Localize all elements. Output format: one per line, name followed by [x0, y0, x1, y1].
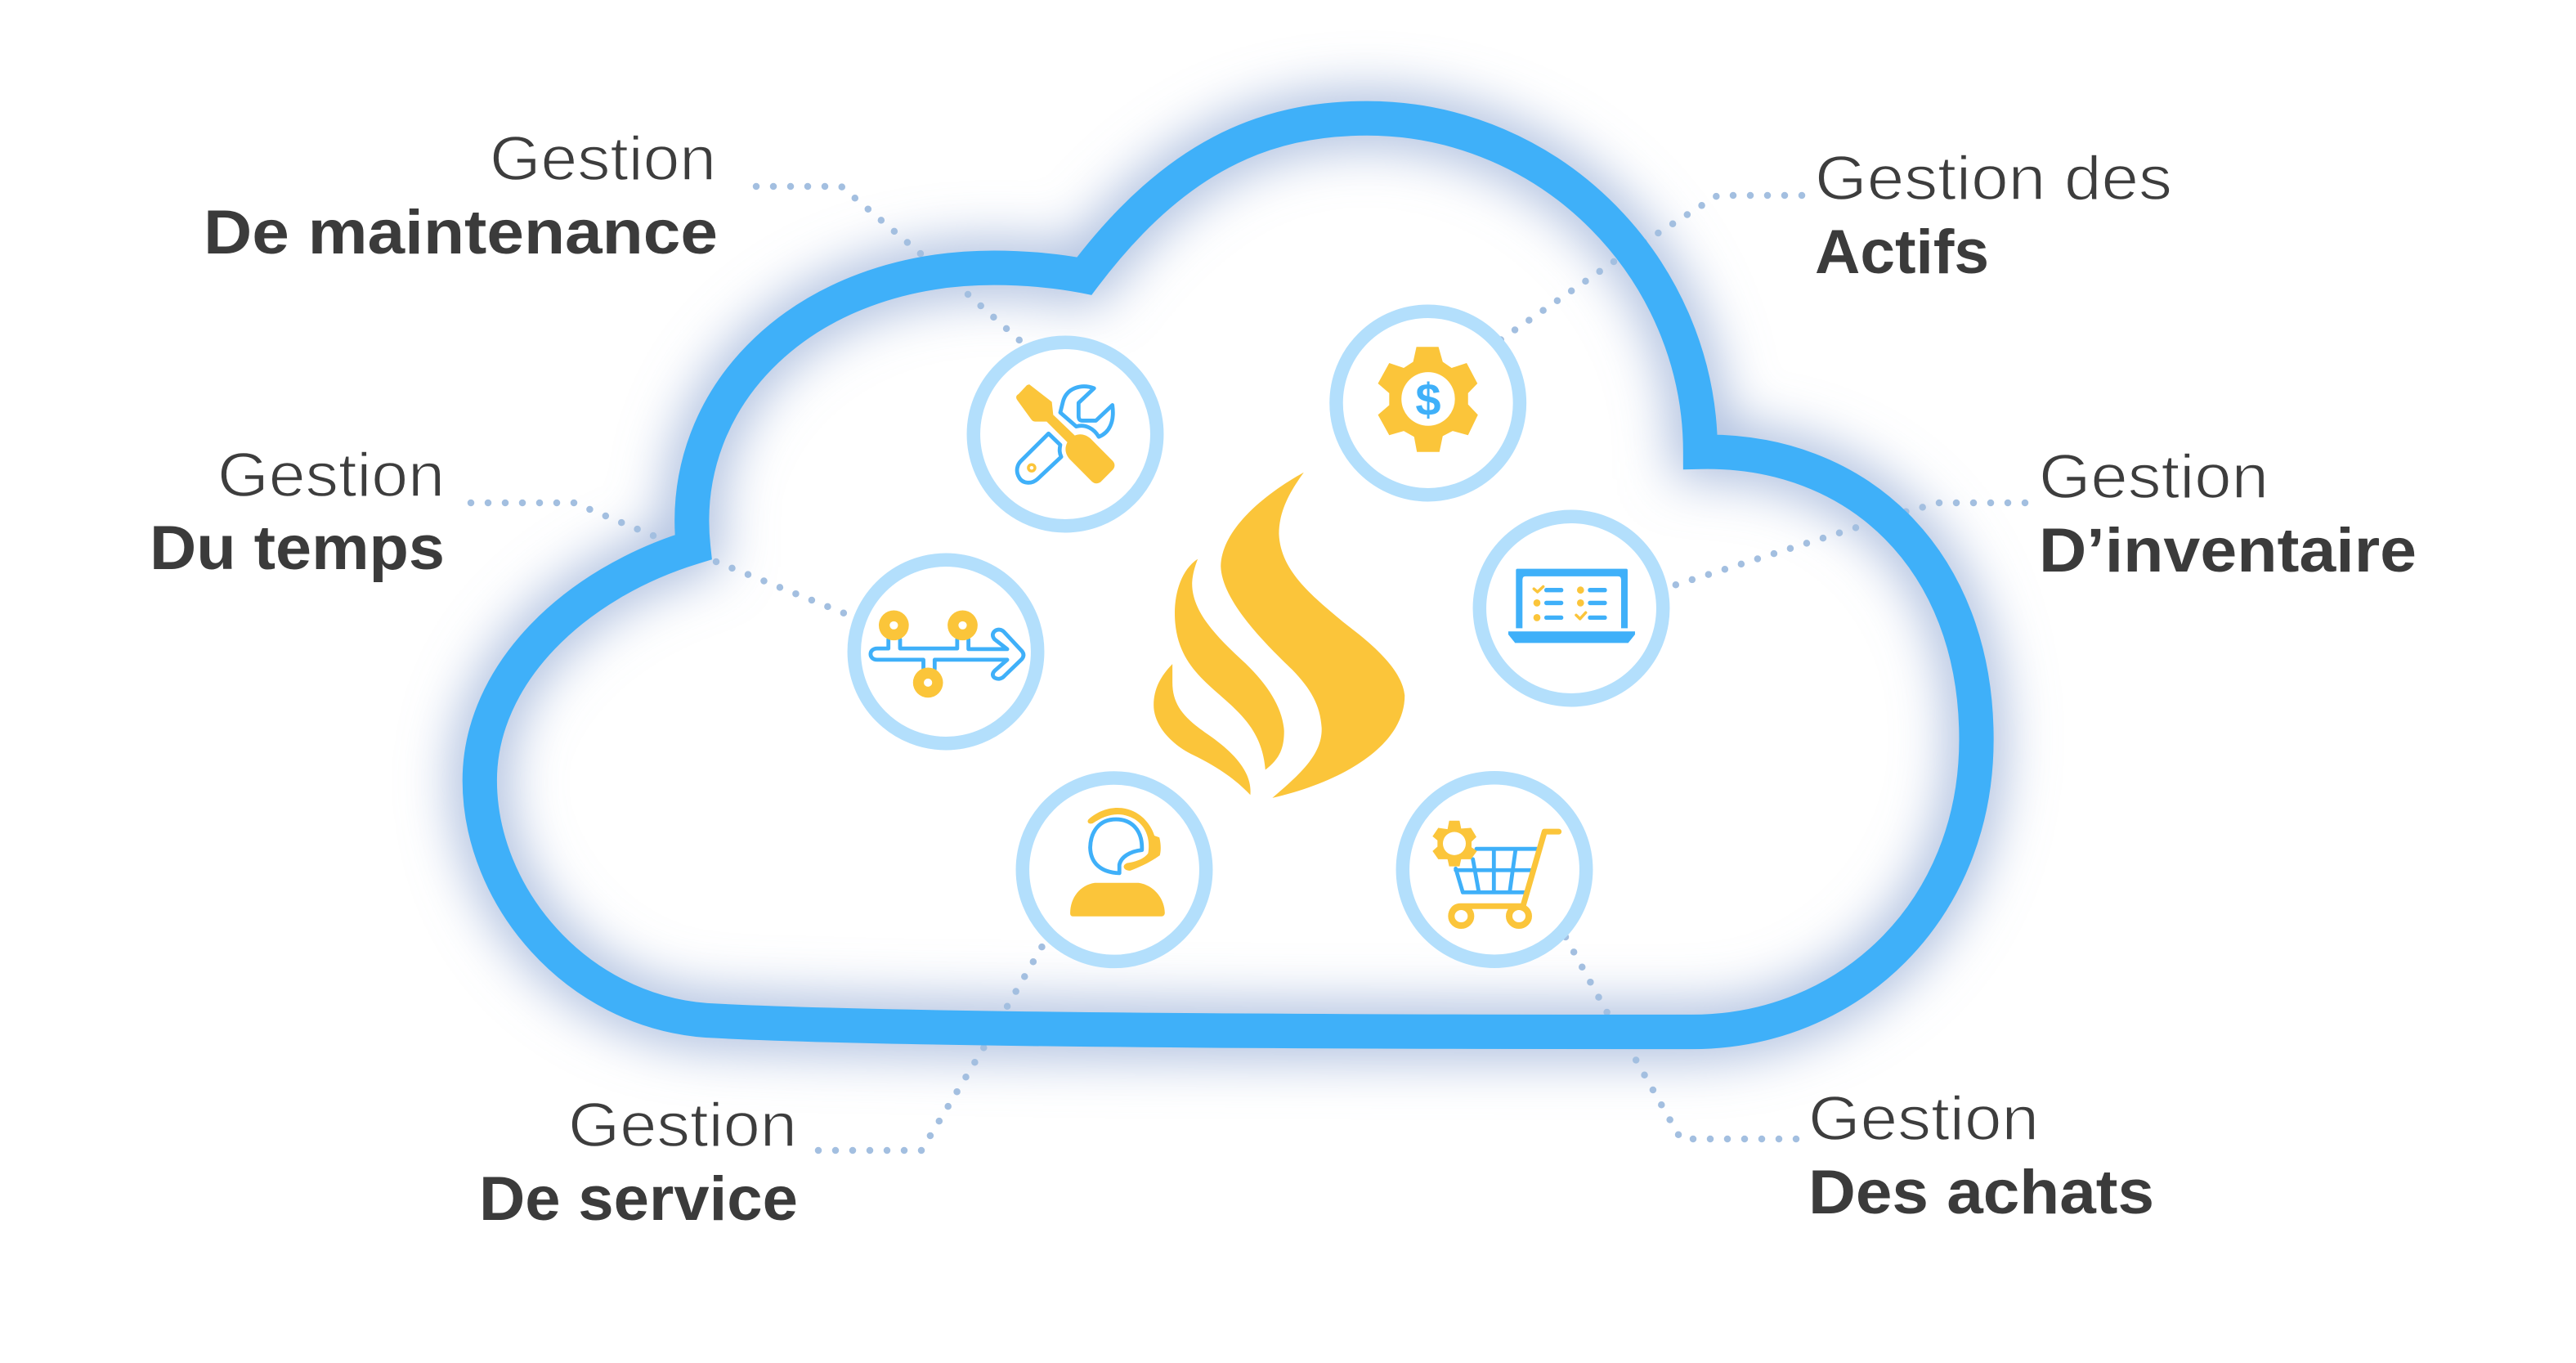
icon: maintenance tools	[974, 343, 1157, 526]
label: gestion du temps	[150, 441, 445, 583]
connector: inventaire	[1664, 503, 2025, 589]
connector: maintenance	[756, 186, 1042, 361]
label: gestion d'inventaire: D’inventaire	[2039, 516, 2417, 585]
label: gestion des actifs: Gestion des	[1815, 144, 2172, 213]
label: gestion du temps: Gestion	[217, 441, 445, 510]
label: gestion de maintenance	[204, 124, 718, 267]
label: gestion de maintenance: Gestion	[490, 124, 716, 194]
label: gestion des actifs	[1815, 144, 2172, 287]
label: gestion d'inventaire: Gestion	[2039, 442, 2269, 512]
icon: shopping cart	[1403, 778, 1586, 962]
icon: customer service headset	[1023, 778, 1206, 962]
cloud glow	[480, 119, 1977, 1032]
connector: actifs	[1500, 195, 1802, 340]
label: gestion de maintenance: De maintenance	[204, 198, 718, 267]
label: gestion des achats	[1808, 1084, 2154, 1227]
label: gestion des actifs: Actifs	[1815, 217, 1989, 287]
label: gestion de service: De service	[479, 1164, 798, 1234]
label: gestion de service	[479, 1091, 798, 1234]
label: gestion du temps: Du temps	[150, 513, 445, 583]
flame logo	[1154, 473, 1404, 798]
label: gestion des achats: Gestion	[1808, 1084, 2039, 1154]
icon: inventory laptop	[1480, 517, 1663, 700]
label: gestion d'inventaire	[2039, 442, 2417, 585]
connector: achats	[1566, 937, 1796, 1139]
label: gestion de service: Gestion	[568, 1091, 797, 1160]
cloud outline	[480, 119, 1977, 1032]
connector: service	[818, 932, 1051, 1150]
icon: asset gear: $	[1415, 374, 1441, 425]
connector: temps	[471, 503, 858, 619]
label: gestion des achats: Des achats	[1808, 1158, 2154, 1227]
icon: timeline arrow	[854, 560, 1037, 743]
icon: asset gear	[1336, 312, 1520, 495]
